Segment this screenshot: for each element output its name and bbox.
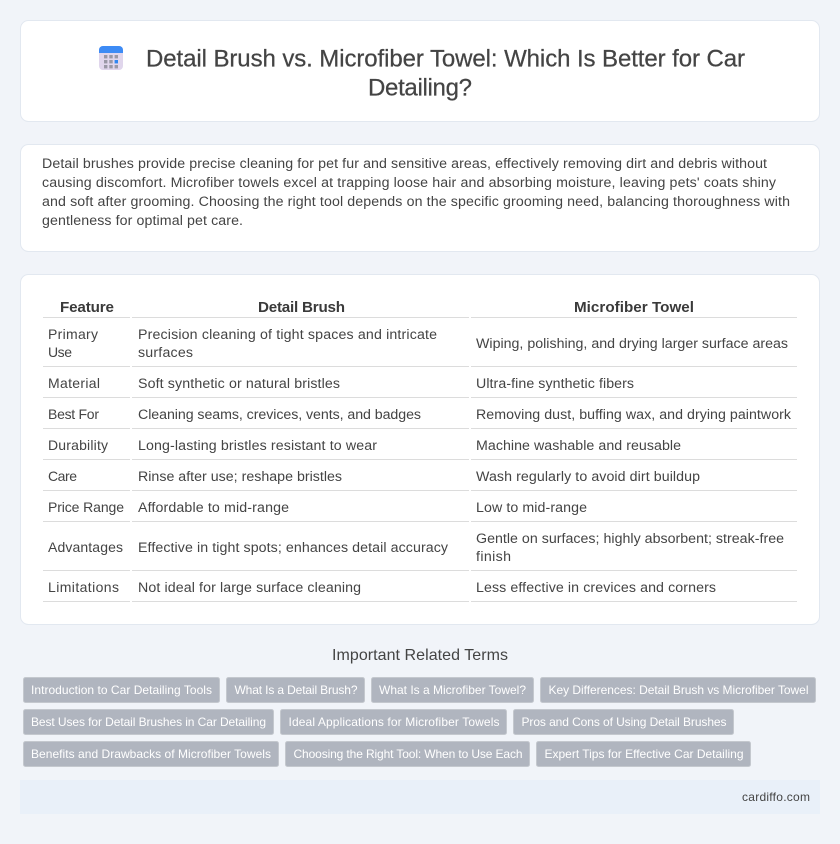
tag: introduction: Introduction to Car Detailing Tools bbox=[31, 683, 212, 697]
row: best for: Removing dust, buffing wax, and drying paintwork bbox=[476, 407, 792, 423]
table header bbox=[60, 299, 694, 316]
row: advantages: Advantages bbox=[48, 539, 123, 555]
row: limitations: Limitations bbox=[48, 579, 119, 595]
table header: Microfiber Towel bbox=[574, 299, 694, 316]
row: best for bbox=[48, 406, 792, 423]
table header: Feature bbox=[60, 299, 114, 316]
row: price range: Affordable to mid-range bbox=[138, 500, 289, 516]
row: limitations bbox=[48, 579, 716, 596]
row: care: Rinse after use; reshape bristles bbox=[138, 469, 342, 485]
panel: title card bbox=[20, 20, 820, 122]
tag: choosing the right tool: Choosing the Right Tool: When to Use Each bbox=[294, 747, 522, 761]
row: durability: Durability bbox=[48, 437, 108, 453]
footer bbox=[20, 780, 820, 814]
row: advantages: finish bbox=[476, 549, 511, 565]
row: limitations: Not ideal for large surface cleaning bbox=[138, 580, 361, 596]
row: primary use bbox=[48, 326, 788, 361]
tag: key differences: Key Differences: Detail Brush vs Microfiber Towel bbox=[548, 683, 808, 697]
text block: introduction paragraph bbox=[42, 156, 790, 229]
tag group: related terms bbox=[24, 678, 816, 766]
footer: cardiffo.com bbox=[742, 790, 810, 804]
tag: choosing the right tool bbox=[286, 742, 530, 766]
row: advantages: Gentle on surfaces; highly absorbent; streak-free bbox=[476, 531, 784, 547]
title: Detail Brush vs. Microfiber Towel: Which Is Better for Car bbox=[146, 46, 745, 72]
tag: benefits and drawbacks bbox=[24, 742, 278, 766]
tag: what is a microfiber towel: What Is a Microfiber Towel? bbox=[379, 683, 526, 697]
row: material: Ultra-fine synthetic fibers bbox=[476, 376, 634, 392]
tag: key differences bbox=[540, 678, 816, 702]
row: primary use: surfaces bbox=[138, 345, 193, 361]
table header: Detail Brush bbox=[258, 299, 345, 316]
row: primary use: Use bbox=[48, 344, 72, 360]
panel: comparison table bbox=[20, 274, 820, 624]
tag: expert tips bbox=[536, 742, 750, 766]
tag: pros and cons: Pros and Cons of Using Detail Brushes bbox=[522, 715, 726, 729]
row: durability: Machine washable and reusable bbox=[476, 438, 681, 454]
row: advantages: Effective in tight spots; enhances detail accuracy bbox=[138, 540, 449, 556]
text block: introduction paragraph: causing discomfort. Microfiber towels excel at trapping loose hair and absorbing moisture, leaving pets' coats shiny bbox=[42, 175, 777, 191]
text block: introduction paragraph: Detail brushes provide precise cleaning for pet fur and sensitive areas, effectively removing dirt and debris without bbox=[42, 156, 767, 172]
tag: expert tips: Expert Tips for Effective Car Detailing bbox=[544, 747, 744, 761]
row: price range: Low to mid-range bbox=[476, 500, 587, 516]
row: best for: Cleaning seams, crevices, vents, and badges bbox=[138, 407, 421, 423]
row: durability: Long-lasting bristles resistant to wear bbox=[138, 438, 377, 454]
tag: introduction bbox=[24, 678, 220, 702]
row: price range: Price Range bbox=[48, 499, 124, 515]
row: care: Wash regularly to avoid dirt buildup bbox=[476, 469, 700, 485]
title: Detailing? bbox=[368, 74, 472, 102]
row: limitations: Less effective in crevices and corners bbox=[476, 580, 716, 596]
tag: what is a microfiber towel bbox=[372, 678, 534, 702]
tag: benefits and drawbacks: Benefits and Drawbacks of Microfiber Towels bbox=[31, 747, 271, 761]
row: primary use: Primary bbox=[48, 326, 98, 342]
heading: important related terms: Important Related Terms bbox=[332, 647, 508, 664]
row: care bbox=[48, 468, 700, 485]
tag: best uses: Best Uses for Detail Brushes in Car Detailing bbox=[31, 715, 266, 729]
row: material bbox=[48, 375, 634, 392]
row: durability bbox=[48, 437, 681, 454]
text block: introduction paragraph: and soft after grooming. Choosing the right tool depends on the specific grooming need, balancing thoroughness with bbox=[42, 194, 790, 210]
row: advantages bbox=[48, 531, 784, 565]
tag: best uses bbox=[24, 710, 274, 734]
tag: ideal applications bbox=[280, 710, 506, 734]
row: primary use: Wiping, polishing, and drying larger surface areas bbox=[476, 336, 788, 352]
row: care: Care bbox=[48, 468, 77, 484]
icon: calendar grid bbox=[99, 46, 123, 70]
tag: what is a detail brush: What Is a Detail Brush? bbox=[234, 683, 358, 697]
row: material: Material bbox=[48, 375, 100, 391]
tag: pros and cons bbox=[514, 710, 734, 734]
row: best for: Best For bbox=[48, 406, 99, 422]
panel: introduction bbox=[20, 144, 820, 252]
tag: what is a detail brush bbox=[226, 678, 364, 702]
text block: introduction paragraph: gentleness for optimal pet care. bbox=[42, 213, 243, 229]
row: price range bbox=[48, 499, 587, 516]
row: primary use: Precision cleaning of tight spaces and intricate bbox=[138, 327, 437, 343]
row: material: Soft synthetic or natural bristles bbox=[138, 376, 340, 392]
title bbox=[146, 46, 745, 102]
tag: ideal applications: Ideal Applications for Microfiber Towels bbox=[288, 715, 500, 729]
